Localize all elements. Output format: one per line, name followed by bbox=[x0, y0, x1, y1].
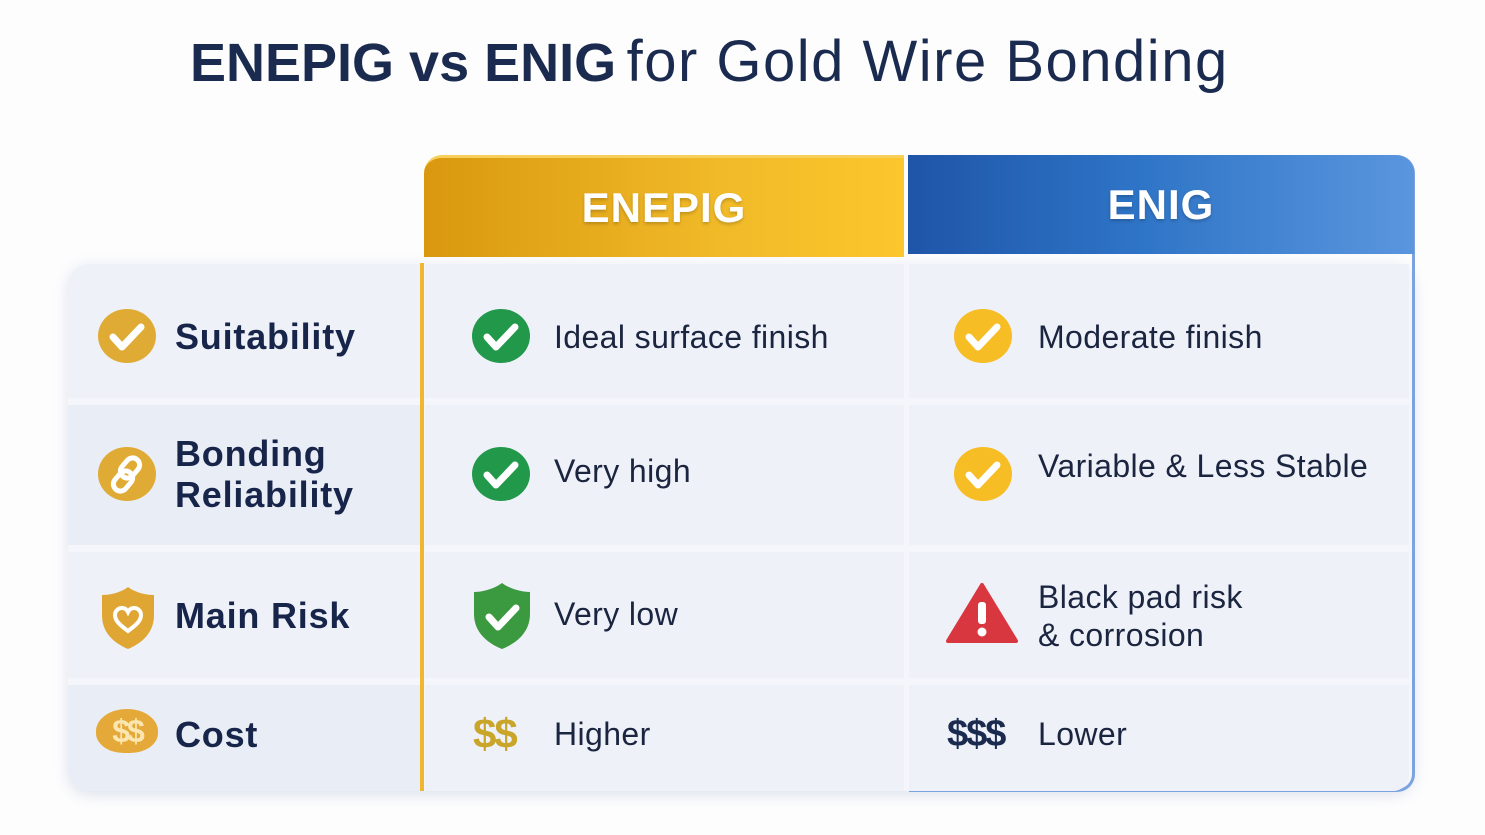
row 4: Cost bbox=[96, 709, 1127, 757]
icon: green check bbox=[472, 309, 530, 363]
header: ENIG: ENIG bbox=[1108, 180, 1214, 228]
label: Reliability bbox=[175, 474, 354, 515]
row cells bbox=[68, 264, 420, 398]
label: Bonding bbox=[175, 433, 327, 474]
value ENIG: Moderate finish bbox=[1038, 319, 1263, 355]
value ENIG: Lower bbox=[1038, 716, 1127, 752]
row 2: Bonding Reliability bbox=[98, 433, 1368, 515]
icon: yellow check bbox=[954, 309, 1012, 363]
value ENEPIG: Very high bbox=[554, 453, 691, 489]
value ENEPIG: Very low bbox=[554, 596, 678, 632]
title: ENEPIG vs ENIG for Gold Wire Bonding bbox=[190, 29, 1229, 94]
label bbox=[175, 433, 354, 515]
icon: gold coins: $$ bbox=[112, 713, 142, 749]
gold divider bbox=[420, 263, 424, 791]
value ENEPIG: Ideal surface finish bbox=[554, 319, 829, 355]
row 3: Main Risk bbox=[102, 579, 1243, 653]
icon: $$: $$ bbox=[473, 710, 516, 757]
icon: gold shield heart bbox=[102, 587, 154, 649]
header: ENIG bbox=[908, 155, 1414, 254]
value ENIG: Variable & Less Stable bbox=[1038, 448, 1368, 484]
icon: gold check bbox=[98, 309, 156, 363]
value ENIG bbox=[1038, 579, 1243, 653]
icon: green check bbox=[472, 447, 530, 501]
value ENEPIG: Higher bbox=[554, 716, 651, 752]
icon: gold coins bbox=[96, 709, 158, 753]
comparison table bbox=[64, 155, 1418, 800]
icon: $$$: $$$ bbox=[947, 713, 1004, 755]
icon: yellow check bbox=[954, 447, 1012, 501]
icon: green shield check bbox=[474, 583, 530, 649]
blue ENIG border bbox=[909, 155, 1415, 792]
icon: warning triangle bbox=[946, 582, 1018, 643]
row 1: Suitability bbox=[98, 309, 1263, 363]
label: Cost bbox=[175, 714, 258, 755]
label: Suitability bbox=[175, 316, 356, 357]
icon: chain link bbox=[98, 447, 156, 501]
table background bbox=[68, 263, 1414, 791]
header: ENEPIG: ENEPIG bbox=[582, 184, 746, 230]
value ENIG: Black pad risk bbox=[1038, 579, 1243, 615]
label: Main Risk bbox=[175, 595, 350, 636]
header: ENEPIG bbox=[424, 155, 904, 257]
value ENIG: & corrosion bbox=[1038, 617, 1204, 653]
